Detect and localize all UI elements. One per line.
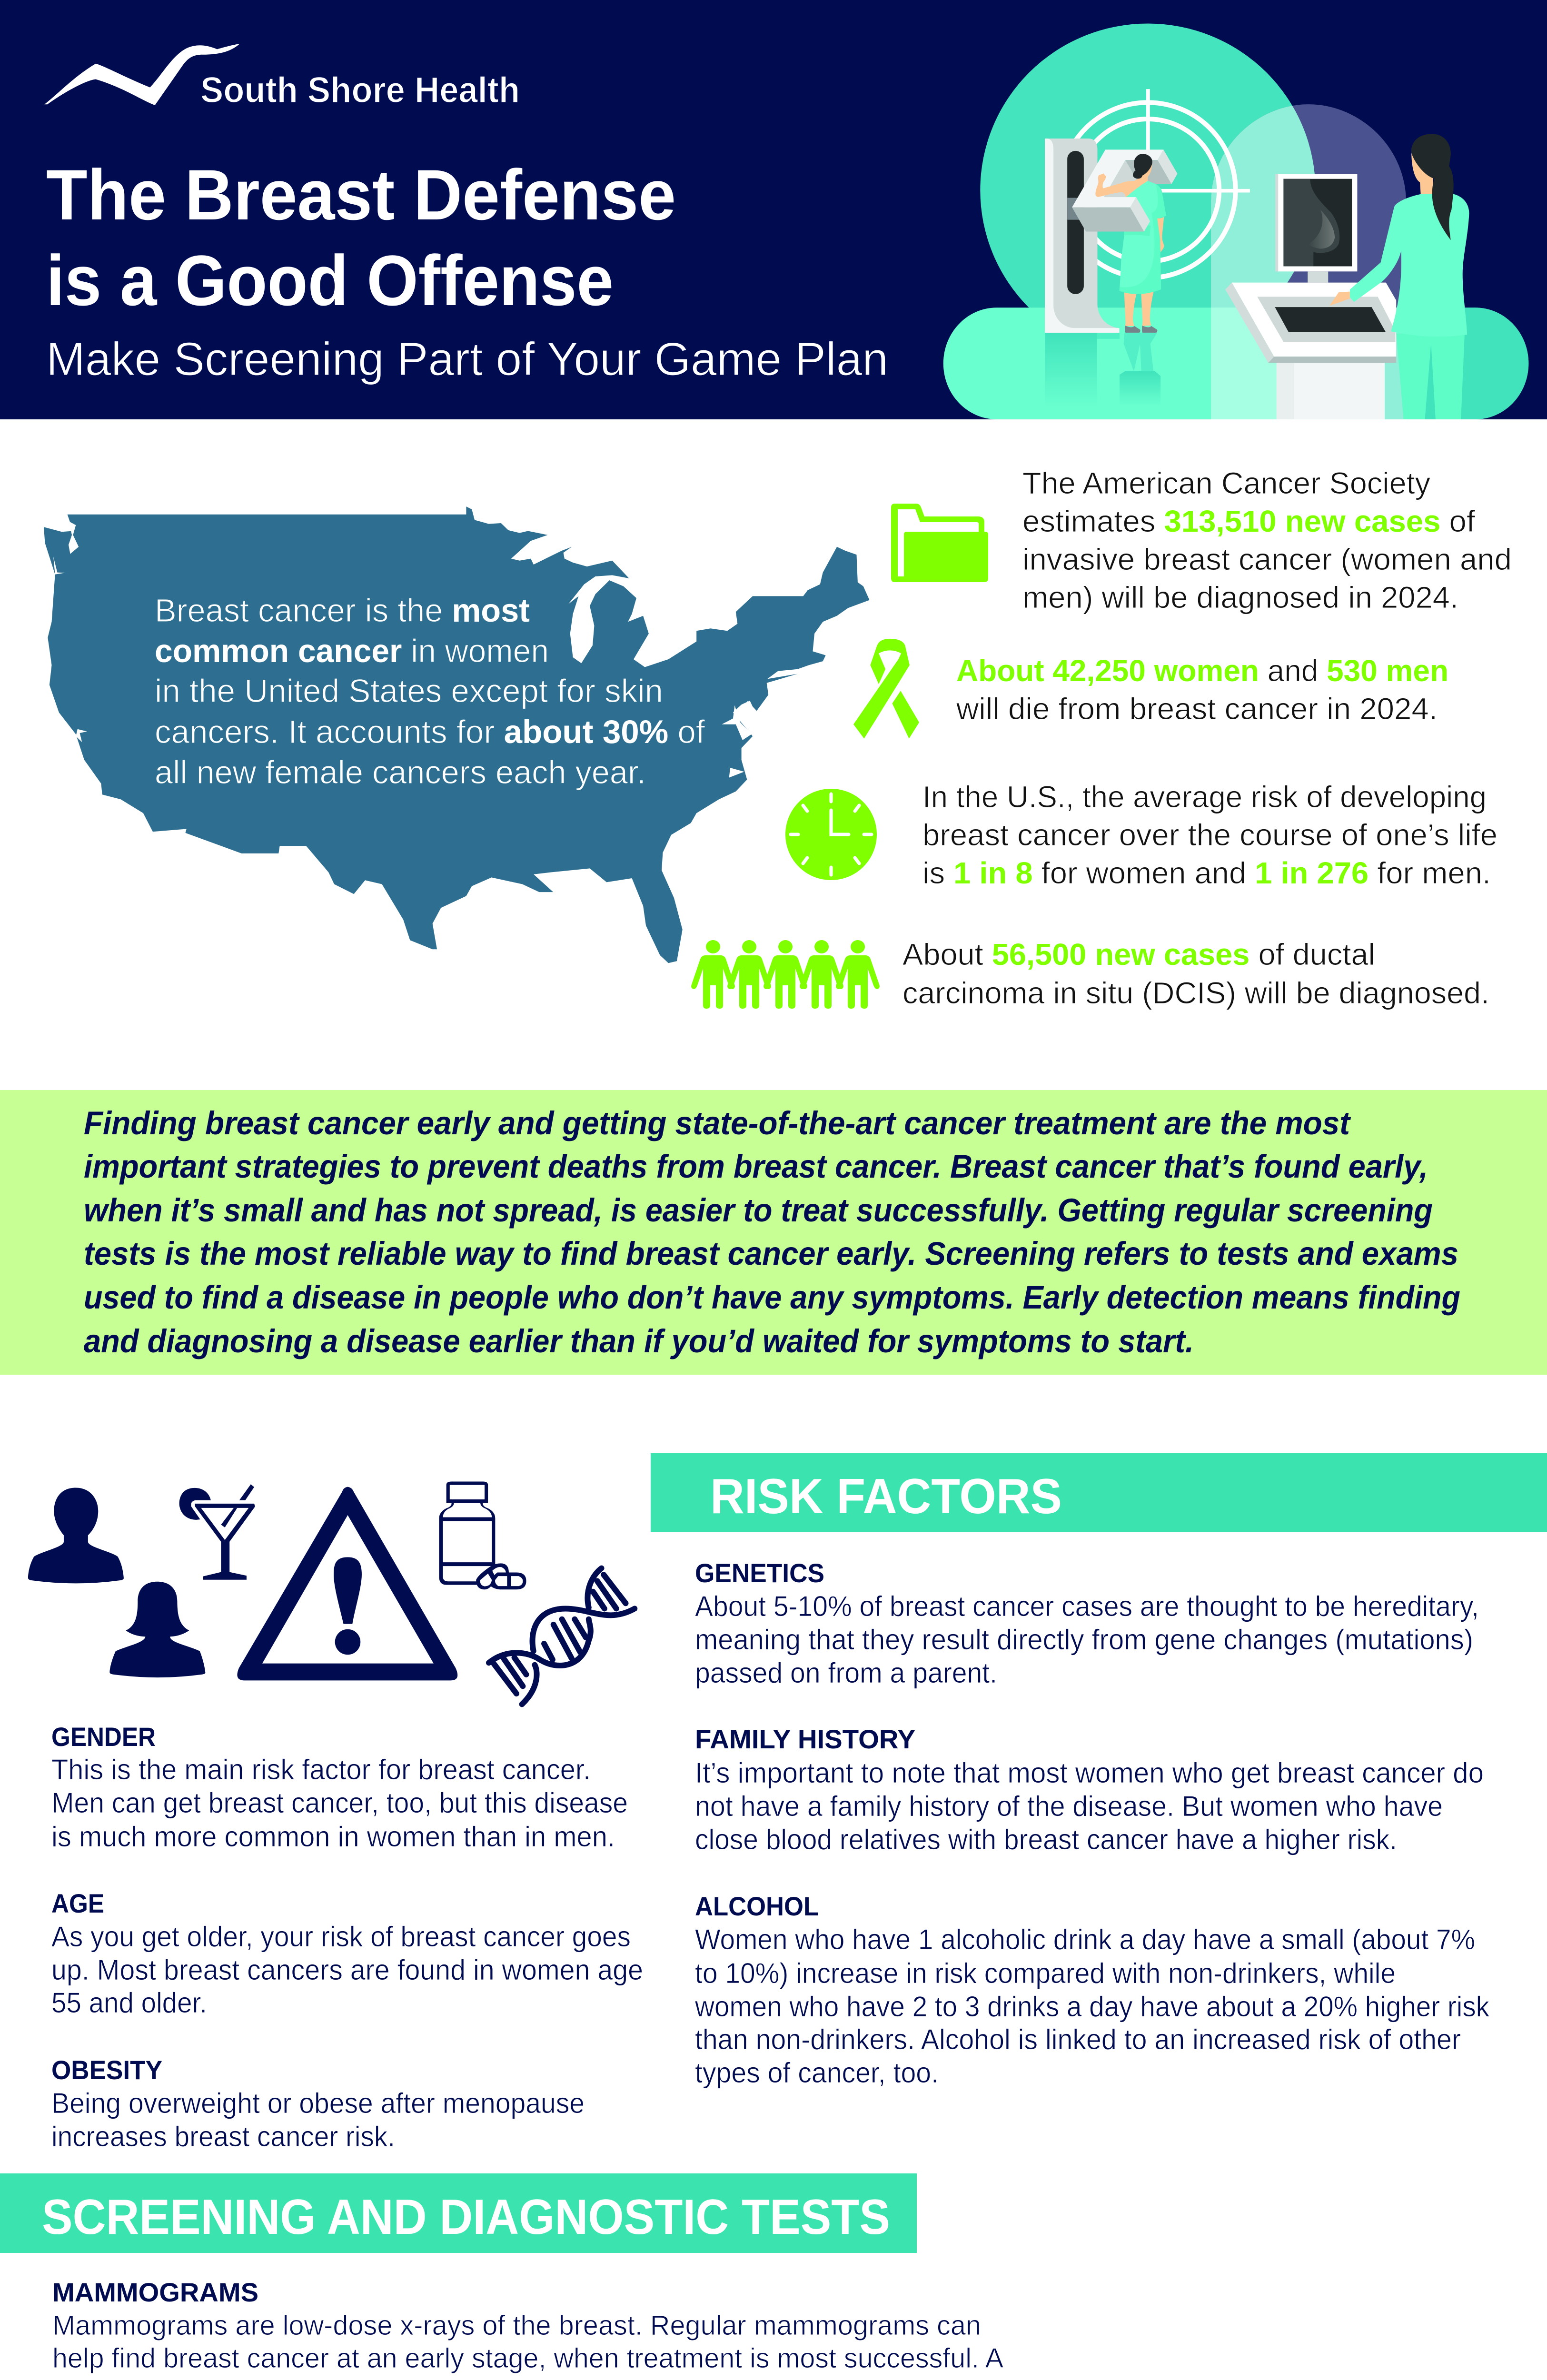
icon: man: [28, 1488, 124, 1583]
stat: new cases: invasive breast cancer (women and: [1022, 542, 1512, 576]
icon: ribbon: [853, 639, 919, 739]
illustration: mammogram room: [943, 23, 1529, 419]
panel: risk factors right column: [651, 1453, 1547, 2089]
heading and text: gender: GENDER: [51, 1722, 156, 1752]
title: is a Good Offense: [46, 240, 614, 320]
callout text: tests is the most reliable way to find breast cancer early. Screening refers to tests and exams: [84, 1235, 1458, 1272]
stat: DCIS: About 56,500 new cases of ductal: [902, 937, 1375, 972]
icon: clock: [785, 789, 877, 880]
icon: folder: [891, 504, 988, 582]
heading: screening and diagnostic tests: SCREENING AND DIAGNOSTIC TESTS: [42, 2190, 890, 2245]
logo: South Shore Health: South Shore Health: [200, 70, 520, 110]
heading and text: mammograms: Mammograms are low-dose x-rays of the breast. Regular mammograms can: [52, 2310, 981, 2341]
heading and text: obesity: increases breast cancer risk.: [51, 2121, 395, 2152]
stat: DCIS: carcinoma in situ (DCIS) will be diagnosed.: [902, 976, 1489, 1010]
stat: new cases: men) will be diagnosed in 2024.: [1022, 580, 1458, 615]
heading and text: alcohol: women who have 2 to 3 drinks a day have about a 20% higher risk: [694, 1991, 1490, 2023]
heading and text: family history: It’s important to note that most women who get breast cancer do: [695, 1757, 1484, 1789]
heading and text: age: up. Most breast cancers are found in women age: [51, 1954, 643, 1986]
heading and text: obesity: Being overweight or obese after menopause: [51, 2087, 585, 2119]
map statistic text: [155, 592, 705, 791]
heading and text: alcohol: Women who have 1 alcoholic drink a day have a small (about 7%: [695, 1924, 1475, 1955]
heading and text: obesity: [51, 2055, 585, 2152]
heading and text: alcohol: [694, 1891, 1490, 2089]
panel: early detection callout: [0, 1090, 1547, 1375]
stat: lifetime risk: [922, 780, 1497, 890]
heading: risk factors: RISK FACTORS: [710, 1469, 1062, 1524]
icon: martini: [179, 1484, 255, 1580]
map of the United States: [44, 506, 870, 963]
heading and text: alcohol: ALCOHOL: [695, 1891, 819, 1921]
stat: deaths: [956, 654, 1448, 726]
icon: warning triangle: [237, 1487, 457, 1680]
heading and text: alcohol: than non-drinkers. Alcohol is linked to an increased risk of other: [695, 2023, 1461, 2055]
heading and text: mammograms: [52, 2277, 1003, 2380]
title: The Breast Defense: [46, 155, 676, 235]
heading: screening and diagnostic tests: [0, 2173, 917, 2253]
icon: pill bottle: [439, 1481, 526, 1589]
panel: header: [0, 0, 1547, 419]
map statistic text: in the United States except for skin: [155, 673, 663, 709]
stat: deaths: About 42,250 women and 530 men: [956, 654, 1448, 688]
icon: DNA helix: [489, 1568, 635, 1704]
heading and text: alcohol: to 10%) increase in risk compared with non-drinkers, while: [695, 1957, 1396, 1989]
icon: woman: [109, 1582, 205, 1677]
panel: US map with statistic: [44, 506, 870, 963]
heading and text: age: [51, 1888, 643, 2019]
callout text: when it’s small and has not spread, is easier to treat successfully. Getting regular screening: [84, 1192, 1433, 1229]
panel: risk factors left column: [51, 1722, 643, 2152]
heading and text: gender: [51, 1722, 628, 1853]
heading and text: genetics: [695, 1558, 1479, 1689]
heading and text: alcohol: types of cancer, too.: [695, 2057, 939, 2089]
stat: lifetime risk: breast cancer over the course of one’s life: [922, 818, 1497, 852]
heading and text: genetics: GENETICS: [695, 1558, 824, 1588]
heading and text: gender: is much more common in women than in men.: [51, 1821, 615, 1853]
panel: screening and diagnostic tests: [0, 2173, 1530, 2380]
heading and text: genetics: meaning that they result directly from gene changes (mutations): [695, 1624, 1473, 1656]
heading and text: family history: close blood relatives with breast cancer have a higher risk.: [695, 1824, 1397, 1855]
heading and text: genetics: passed on from a parent.: [695, 1657, 997, 1689]
icon: people: [691, 940, 880, 1009]
map statistic text: cancers. It accounts for about 30% of: [155, 714, 705, 750]
title: [46, 155, 676, 320]
heading and text: mammograms: MAMMOGRAMS: [52, 2277, 258, 2307]
heading and text: family history: not have a family history of the disease. But women who have: [695, 1790, 1443, 1822]
logo: South Shore Health: [44, 44, 520, 110]
heading and text: gender: This is the main risk factor for breast cancer.: [51, 1754, 591, 1785]
heading and text: genetics: About 5-10% of breast cancer cases are thought to be hereditary,: [695, 1590, 1479, 1622]
map statistic text: common cancer in women: [155, 633, 549, 669]
heading and text: gender: Men can get breast cancer, too, but this disease: [51, 1787, 628, 1819]
subtitle: Make Screening Part of Your Game Plan: [46, 333, 888, 385]
heading: risk factors: [651, 1453, 1547, 1532]
stat: DCIS: [902, 937, 1489, 1010]
heading and text: family history: [695, 1724, 1484, 1855]
heading and text: age: As you get older, your risk of breast cancer goes: [51, 1921, 631, 1953]
panel: risk factor icons: [28, 1481, 635, 1704]
heading and text: family history: FAMILY HISTORY: [695, 1724, 915, 1754]
callout text: and diagnosing a disease earlier than if you’d waited for symptoms to start.: [84, 1323, 1194, 1359]
stat: new cases: [1022, 466, 1512, 615]
panel: statistics: [691, 466, 1512, 1010]
stat: lifetime risk: In the U.S., the average risk of developing: [922, 780, 1487, 814]
heading and text: obesity: OBESITY: [51, 2055, 162, 2085]
stat: deaths: will die from breast cancer in 2024.: [956, 692, 1438, 726]
heading and text: age: AGE: [51, 1888, 104, 1918]
callout text: Finding breast cancer early and getting state-of-the-art cancer treatment are the most: [84, 1105, 1351, 1141]
stat: lifetime risk: is 1 in 8 for women and 1 in 276 for men.: [922, 856, 1491, 890]
stat: new cases: The American Cancer Society: [1022, 466, 1430, 500]
map statistic text: Breast cancer is the most: [155, 592, 530, 629]
callout text: important strategies to prevent deaths from breast cancer. Breast cancer that’s found early,: [84, 1148, 1428, 1185]
heading and text: age: 55 and older.: [51, 1987, 207, 2019]
callout text: used to find a disease in people who don’t have any symptoms. Early detection means finding: [84, 1279, 1460, 1316]
heading and text: mammograms: help find breast cancer at an early stage, when treatment is most successful. A: [52, 2343, 1003, 2374]
callout text: [84, 1105, 1460, 1359]
map statistic text: all new female cancers each year.: [155, 754, 646, 791]
stat: new cases: estimates 313,510 new cases of: [1022, 504, 1475, 538]
